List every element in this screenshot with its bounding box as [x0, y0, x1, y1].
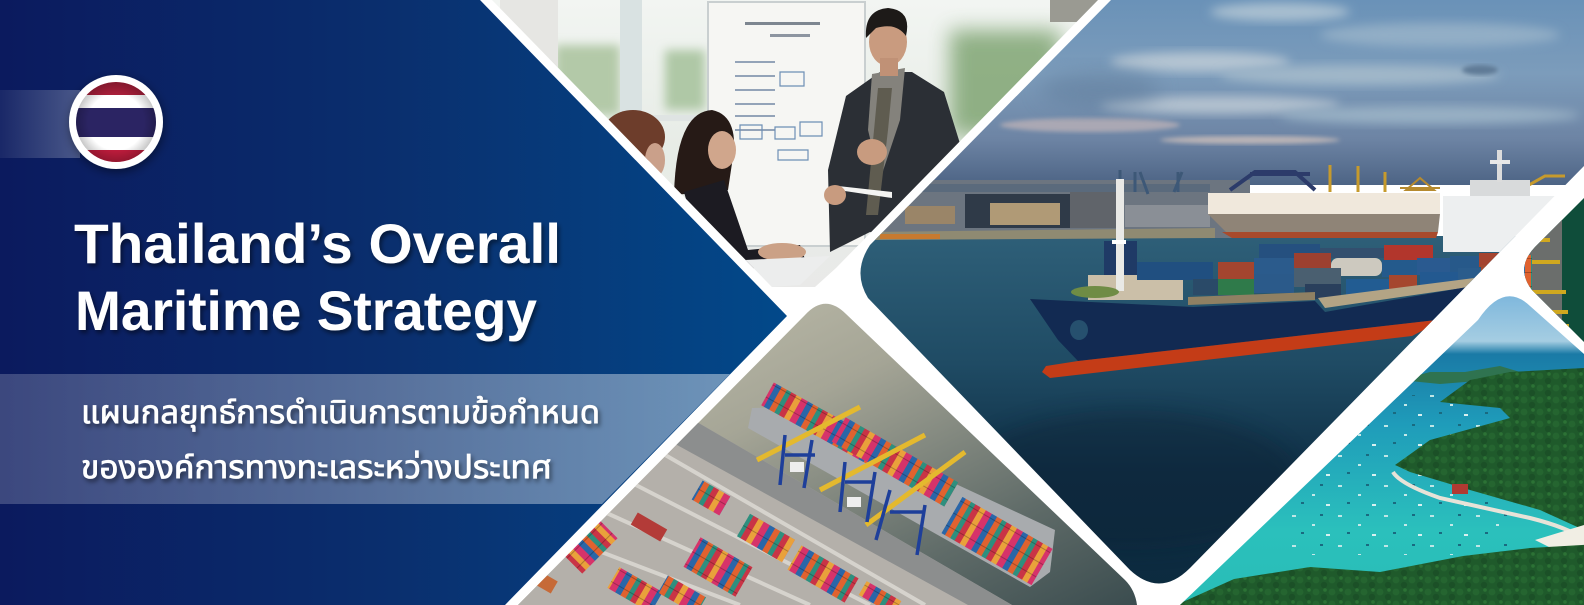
title: Thailand’s Overall — [74, 212, 561, 275]
boats — [1290, 395, 1510, 555]
port skyline — [850, 165, 1565, 240]
icon: Thailand flag badge — [69, 75, 163, 169]
forest foreground — [1165, 544, 1584, 605]
navy chevron panel — [0, 0, 787, 605]
photo: tropical island bay — [1165, 290, 1584, 605]
presenter — [824, 8, 962, 252]
containers — [1137, 244, 1508, 299]
Thai subtitle: แผนกลยุทธ์การดำเนินการตามข้อกำหนด — [81, 394, 600, 431]
breakwater and beach — [1393, 472, 1584, 550]
white superstructure — [1443, 150, 1560, 252]
photo: container ship at port — [850, 0, 1584, 601]
Thai subtitle: ขององค์การทางทะเลระหว่างประเทศ — [81, 449, 552, 485]
woman with brown hair — [608, 110, 665, 174]
woman in black suit — [674, 110, 806, 270]
clouds — [1000, 3, 1580, 144]
title — [74, 212, 561, 342]
flag backing strip — [0, 90, 80, 158]
title: Maritime Strategy — [75, 279, 537, 342]
photo: aerial port strip — [1524, 198, 1584, 342]
white car carrier — [1208, 193, 1440, 238]
container ship — [1030, 179, 1508, 378]
sea — [860, 236, 1516, 584]
photo: aerial view of container port — [510, 290, 1150, 605]
yard containers — [528, 480, 901, 605]
cranes — [757, 407, 965, 555]
moored container ship — [748, 383, 1055, 587]
whiteboard — [708, 2, 865, 246]
quay and yard — [510, 418, 1012, 605]
small island — [1414, 366, 1519, 384]
photo: office meeting — [480, 0, 1110, 295]
Thai subtitle — [81, 394, 600, 485]
translucent subtitle band — [0, 374, 730, 504]
green mountain — [1395, 368, 1584, 530]
